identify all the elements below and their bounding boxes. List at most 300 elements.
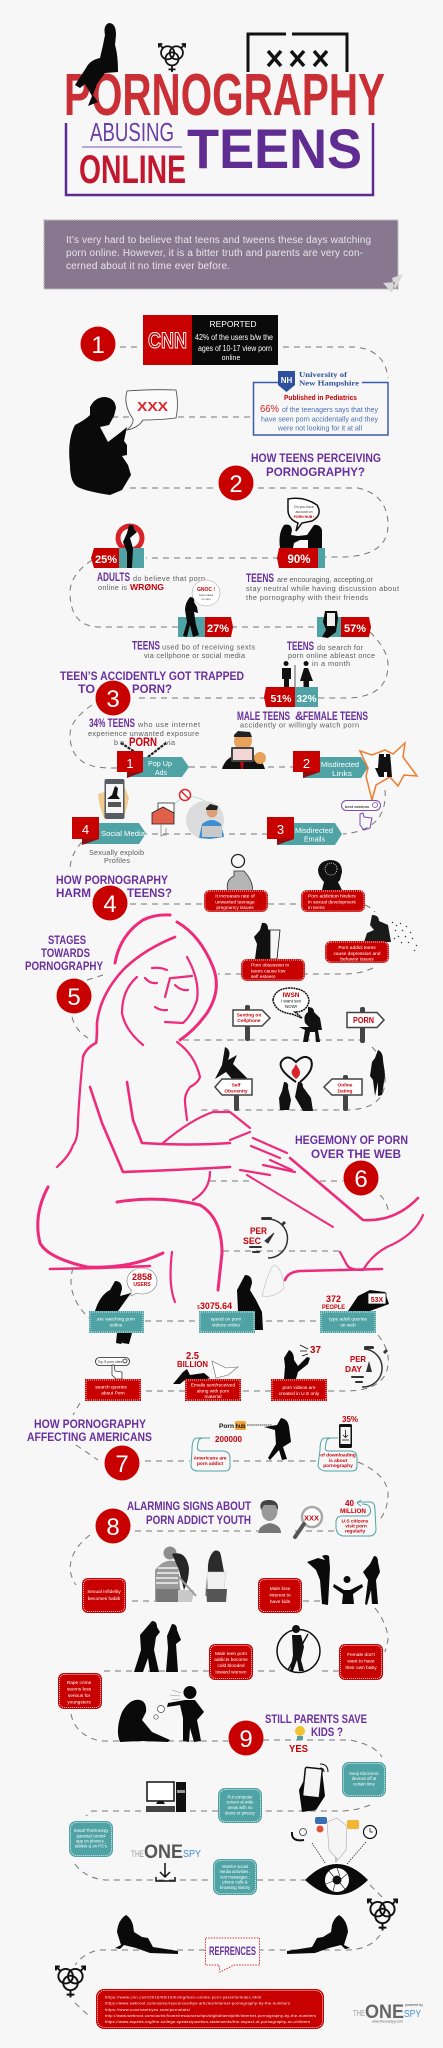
box: sexual infidelity: Sexual Infidelity xyxy=(87,1589,121,1595)
box: monitor social xyxy=(213,1859,257,1895)
item: depression: behavior issues xyxy=(340,956,374,962)
heading: stages towards pornography xyxy=(25,933,103,973)
sign: online dating: Dating xyxy=(338,1088,353,1094)
icon: per second stopwatch xyxy=(243,1217,288,1258)
stat: 57% teens: porn online ableast once xyxy=(288,651,375,660)
stat: search queries: Top 5 porn sites xyxy=(98,1360,123,1364)
panel: University of New Hampshire: New Hampshire xyxy=(299,378,360,388)
sign: sexting on cellphone xyxy=(233,1005,270,1041)
box: rape crime xyxy=(58,1673,102,1709)
icon: heart and couple at computers xyxy=(279,1057,313,1111)
stat: 90% teens: stay neutral while having discussion about xyxy=(246,584,399,593)
icon: eye and monitoring symbols xyxy=(292,1817,376,1895)
heading: alarming signs: ALARMING SIGNS ABOUT xyxy=(127,1499,252,1513)
box: install theonespy: tablets & on PC's xyxy=(75,1844,107,1848)
text: 34% teens exposure: via xyxy=(165,738,176,747)
stat: 25% adults: WRØNG xyxy=(130,582,164,592)
icon: gender symbol right xyxy=(368,1900,397,1930)
item: sexual development: Porn addiction hinders xyxy=(308,894,356,900)
stat: 90% teens: 90% xyxy=(287,554,311,566)
step 7 number: 7 xyxy=(115,1451,129,1478)
item: depression: cause depression and xyxy=(334,951,381,957)
icon: orange starburst with silhouettes xyxy=(360,743,417,800)
step 4 number xyxy=(92,886,128,920)
box: female baby: their own baby xyxy=(345,1665,377,1671)
box: male lose interest: Male lose xyxy=(270,1586,291,1592)
box: rape crime: Rape crime xyxy=(67,1680,92,1686)
stat: $3075.64: 3075.64 xyxy=(200,1301,232,1311)
intro text panel: cerned about it no time ever before. xyxy=(66,261,230,272)
heading: hegemony of porn: OVER THE WEB xyxy=(311,1147,401,1161)
stat: 90% teens: the pornography with their friends xyxy=(246,593,368,602)
box: keep devices off: Keep Electronic xyxy=(349,1771,379,1776)
icon: per second stopwatch: PER xyxy=(250,1226,267,1236)
stat: 372 people: on web xyxy=(340,1322,356,1328)
stat: male and female teens: FEMALE TEENS xyxy=(303,709,368,723)
logo: theonespy footer xyxy=(353,2002,423,2024)
box: cold blooded: toward women xyxy=(215,1670,247,1676)
stat: 27% teens: Gets naked xyxy=(199,593,214,597)
stat: 37 porn videos: 37 xyxy=(310,1345,321,1356)
box: female baby xyxy=(339,1644,383,1680)
heading: how teens perceiving pornography: HOW TEENS PERCEIVING xyxy=(251,451,381,465)
step 8 number xyxy=(96,1508,130,1544)
icon: desktop computer xyxy=(146,1782,186,1812)
stat: 25% adults: 25% xyxy=(95,554,117,566)
heading: hegemony of porn xyxy=(295,1133,408,1161)
box: put computer: screen at wide xyxy=(226,1800,254,1804)
box: monitor social: Monitor social xyxy=(222,1864,248,1869)
stat: 25% adults: ADULTS xyxy=(97,570,130,584)
heading: hegemony of porn: HEGEMONY OF PORN xyxy=(295,1133,408,1147)
stat: 2858 users: online xyxy=(110,1322,123,1328)
step 1 number xyxy=(80,326,116,362)
stat: 35% downloading xyxy=(318,1415,358,1471)
step 8 number: 8 xyxy=(106,1514,120,1541)
stat: 2858 users: are watching porn xyxy=(97,1316,135,1322)
stat: pornhub 200000: Porn xyxy=(219,1423,234,1430)
stat: 2.5 billion emails: Emails sent/received xyxy=(191,1382,235,1388)
icon: boy with phone and speech bubble xyxy=(69,390,178,495)
box: rape crime: seems less xyxy=(67,1686,92,1692)
box: cold blooded: addicts become xyxy=(214,1657,248,1663)
stat: 27% teens: via cellphone or social media xyxy=(144,651,246,660)
box: male lose interest xyxy=(258,1578,302,1613)
logo: theonespy: THE xyxy=(131,1849,144,1859)
box: rape crime: youngsters xyxy=(67,1700,91,1706)
intro text panel: porn online. However, it is a bitter truth and parents are very con- xyxy=(66,248,363,259)
text: 34% teens exposure: who use internet xyxy=(137,720,200,729)
logo: theonespy footer: powered by xyxy=(405,2003,423,2007)
icon: sitting person with speech bubble: IWSN xyxy=(283,992,300,999)
stat: 2.5 billion emails: material xyxy=(204,1394,222,1400)
sign: porn xyxy=(347,1007,384,1043)
stat: $3075.64: $ xyxy=(197,1305,200,1311)
heading: still parents save kids: STILL PARENTS SAVE xyxy=(265,1712,367,1726)
stat: search queries: about Porn xyxy=(101,1390,125,1396)
stat: 35% downloading: pornography xyxy=(323,1463,353,1469)
text: 34% teens exposure: PORN xyxy=(129,735,157,749)
panel: University of New Hampshire xyxy=(254,370,388,435)
box: monitor social: text messages , xyxy=(220,1874,250,1880)
heading: how teens perceiving pornography xyxy=(251,451,381,479)
box: put computer: doors or privacy xyxy=(225,1810,256,1816)
stat: 40 million: U.S citizens xyxy=(342,1518,369,1524)
box: monitor social: media activities , xyxy=(220,1869,250,1874)
stat: 372 people: 372 xyxy=(326,1294,341,1304)
icon: faceless youth xyxy=(258,1500,281,1533)
sign: sexting on cellphone: Cellphone xyxy=(237,1018,261,1024)
illustration: pink line drawing of a woman xyxy=(38,915,423,1302)
stat: male and female teens: & xyxy=(295,709,304,723)
heading: teens accidently got trapped: TEEN’S ACCIDENTLY GOT TRAPPED xyxy=(60,669,244,683)
stat: 27% teens: on cam xyxy=(201,597,211,601)
step 5 number xyxy=(56,978,92,1014)
logo: theonespy: ONE xyxy=(144,1842,183,1863)
box: keep devices off: devices off at xyxy=(352,1776,377,1781)
stat: $3075.64: spend on porn xyxy=(211,1316,242,1322)
panel: University of New Hampshire: Published in Pediatrics xyxy=(284,395,357,402)
stat: 27% teens: GNOC ! xyxy=(197,587,215,593)
item: unwanted pregnancy: pregnancy issues xyxy=(216,905,254,911)
panel: CNN report xyxy=(143,315,278,365)
panel: reference links: https://www.webroot.com/us/en/resources/tips-articles/internet-pornography-by-the-numbers xyxy=(105,2000,290,2006)
item: low self esteem: teens cause low xyxy=(251,968,286,974)
intro text panel: It’s very hard to believe that teens and tweens these days watching xyxy=(66,235,371,246)
panel: reference links: https://www.acpeds.org/the-college-speaks/position-statements/the-impact-of-pornography-on-children xyxy=(105,2019,310,2024)
panel: University of New Hampshire: NH xyxy=(281,376,292,385)
icon: sitting person with speech bubble xyxy=(273,988,322,1042)
tag: social media: 4 xyxy=(82,822,89,837)
text: 34% teens exposure: bo xyxy=(114,738,124,747)
stat: 40 million: visit porn xyxy=(345,1524,367,1530)
subtitle: online: ONLINE xyxy=(79,148,186,192)
item: depression xyxy=(325,915,417,963)
stat: 35% downloading: of downloading xyxy=(320,1452,356,1458)
panel: CNN report: 42% of the users b/w the xyxy=(195,333,273,342)
icon: boy with phone and speech bubble: XXX xyxy=(137,399,168,414)
panel: reference links: https://www.covenanteyes.com/pornstats/ xyxy=(105,2007,191,2012)
stat: 2858 users: 2858 xyxy=(132,1272,152,1282)
tag: social media: Social Media xyxy=(101,829,146,838)
icon: person at laptop in circle with email xyxy=(152,790,224,839)
stat: 90% teens: TEENS xyxy=(246,571,274,585)
icon: light bulb xyxy=(295,1726,305,1740)
box: install theonespy: Install TheOneSpy xyxy=(74,1828,109,1833)
item: low self esteem: self esteem xyxy=(251,974,276,980)
stat: 372 people: type adult queries xyxy=(329,1316,368,1322)
title block xyxy=(64,23,385,195)
item: sexual development xyxy=(301,860,365,912)
dashed connector path xyxy=(70,347,388,2015)
box: sexual infidelity xyxy=(82,1578,126,1613)
step 4 number: 4 xyxy=(103,891,117,918)
step 2 number xyxy=(218,466,254,500)
item: unwanted pregnancy: unwanted teenage xyxy=(215,900,255,906)
tag: misdirected links: Misdirected xyxy=(321,760,359,769)
panel: University of New Hampshire: of the teenagers says that they xyxy=(282,407,378,414)
step 7 number xyxy=(104,1446,140,1480)
sign: online dating: Online xyxy=(338,1082,353,1088)
tag: misdirected links: Links xyxy=(332,769,352,778)
heading: how pornography affecting americans xyxy=(27,1417,152,1444)
logo: theonespy xyxy=(131,1842,201,1863)
box: keep devices off: certain time xyxy=(353,1782,375,1786)
stat: 57% teens xyxy=(287,611,375,668)
stat: pornhub 200000: porn addict xyxy=(197,1461,223,1467)
step 1 number: 1 xyxy=(91,332,105,359)
text: 34% teens exposure: 34% TEENS xyxy=(89,716,135,730)
box: put computer xyxy=(218,1788,262,1823)
panel: CNN report: online xyxy=(222,355,240,362)
heading: how pornography affecting americans: AFFECTING AMERICANS xyxy=(27,1430,152,1444)
silhouette: cat pose woman right xyxy=(287,1915,350,1954)
logo: theonespy footer: SPY xyxy=(404,2009,421,2020)
tag: pop up ads: Ads xyxy=(155,768,167,777)
icon: sitting person with speech bubble: I want sex xyxy=(281,998,302,1004)
stat: 57% teens: 57% xyxy=(344,623,366,635)
panel: reference links: https://www.cnn.com/2016/06/16/living/teen-online-porn-parents/index.html xyxy=(105,1994,261,2000)
tag: misdirected links xyxy=(293,751,368,778)
heading: teens accidently got trapped: PORN? xyxy=(132,682,172,696)
stat: search queries: search queries xyxy=(95,1384,127,1390)
icon: per second stopwatch: SEC xyxy=(243,1236,261,1246)
stat: 35% downloading: is about xyxy=(329,1458,348,1464)
heading: teens accidently got trapped: TO xyxy=(78,682,95,696)
box: install theonespy: parental control xyxy=(77,1834,105,1838)
logo: theonespy: SPY xyxy=(183,1849,201,1860)
stat: 372 people: PEOPLE xyxy=(322,1305,345,1311)
icon: gender symbol xyxy=(159,44,185,72)
box: sexual infidelity: becomes habib xyxy=(88,1596,121,1602)
stat: male and female teens xyxy=(237,661,368,730)
heading: stages towards pornography: PORNOGRAPHY xyxy=(25,959,103,973)
icon: sad teen and shouting man xyxy=(118,1686,204,1742)
stat: 2.5 billion emails xyxy=(173,1351,241,1401)
icon: sitting person with speech bubble: NOW! xyxy=(285,1004,297,1009)
stat: 90% teens: are encouraging, accepting,or xyxy=(277,575,374,584)
box: install theonespy: app on phones , xyxy=(76,1838,106,1844)
sign: online dating xyxy=(324,1075,362,1111)
step 6 number: 6 xyxy=(354,1166,368,1193)
icon: magnifier with XXX xyxy=(295,1507,322,1537)
box: female baby: want to have xyxy=(347,1658,375,1664)
box: female baby: Female don't xyxy=(347,1652,375,1658)
icon: phone in hand xyxy=(98,779,129,819)
stat: male and female teens: 51% xyxy=(270,693,292,705)
stat: $3075.64 xyxy=(197,1265,284,1333)
box: monitor social: browsing history xyxy=(220,1885,251,1890)
box: monitor social: phone calls & xyxy=(222,1880,248,1884)
step 3 number xyxy=(96,680,130,716)
item: sexual development: in teens xyxy=(308,905,325,911)
panel: reference links xyxy=(96,1989,324,2029)
icon: per day stopwatch: PER xyxy=(350,1354,366,1364)
icon: standing woman xyxy=(370,1050,385,1096)
heading: stages towards pornography: STAGES xyxy=(48,933,86,947)
heading: still parents save kids: KIDS ? xyxy=(311,1725,343,1739)
step 9 number: 9 xyxy=(239,1726,253,1753)
stat: 57% teens: TEENS xyxy=(287,639,314,653)
box: put computer: areas with no xyxy=(228,1805,253,1810)
stat: 27% teens: TEENS xyxy=(132,638,160,652)
stat: 40 million: regularly xyxy=(345,1528,365,1534)
tag: misdirected emails xyxy=(267,817,342,845)
stat: 57% teens: do search for xyxy=(317,643,364,652)
item: unwanted pregnancy xyxy=(204,854,268,912)
stat: male and female teens: MALE TEENS xyxy=(237,709,290,723)
subtitle: abusing: ABUSING xyxy=(90,117,174,147)
icon: arguing couple xyxy=(134,1621,181,1672)
stat: 2.5 billion emails: BILLION xyxy=(177,1360,208,1369)
box: rape crime: serious for xyxy=(68,1693,91,1699)
logo: theonespy footer: ONE xyxy=(365,2002,404,2023)
panel: CNN report: ages of 10-17 view porn xyxy=(198,344,272,353)
stat: pornhub 200000: Americans are xyxy=(193,1456,227,1462)
title: teens: TEENS xyxy=(187,117,362,180)
stat: 40 million: 40 xyxy=(345,1499,355,1508)
logo: theonespy footer: THE xyxy=(353,2009,365,2018)
panel: University of New Hampshire: University of xyxy=(299,370,348,379)
stat: 372 people: 53X xyxy=(371,1297,384,1304)
stat: male and female teens: 32% xyxy=(296,694,317,705)
tag: misdirected emails: Misdirected xyxy=(295,826,333,835)
tag: social media: Sexually exploib xyxy=(89,848,144,857)
icon: gender symbol left xyxy=(56,1966,85,1998)
tag: misdirected emails: 3 xyxy=(277,822,284,837)
stat: 27% teens: 27% xyxy=(207,623,229,635)
stat: 372 people xyxy=(320,1290,389,1333)
stat: 2.5 billion emails: 2.5 xyxy=(186,1351,199,1362)
callout: references xyxy=(206,1938,260,1972)
item: depression: Porn addict teens xyxy=(338,945,376,951)
icon: search bar and pointer xyxy=(342,800,380,830)
text: 34% teens exposure xyxy=(88,716,200,757)
icon: per day stopwatch xyxy=(345,1346,388,1387)
panel: University of New Hampshire: have seen porn accidentally and they xyxy=(261,416,378,424)
box: cold blooded: cold blooded xyxy=(217,1663,245,1669)
icon: magnifier with XXX: XXX xyxy=(304,1514,319,1522)
box: install theonespy xyxy=(69,1821,113,1857)
icon: XXX bracket xyxy=(248,34,347,72)
step 2 number: 2 xyxy=(229,471,243,498)
heading: alarming signs: PORN ADDICT YOUTH xyxy=(146,1513,251,1527)
heading: how pornography harm teens xyxy=(56,873,172,900)
stat: 40 million: MILLION xyxy=(340,1508,366,1515)
stat: 37 porn videos xyxy=(271,1345,327,1401)
text: 34% teens exposure: experience unwanted exposure xyxy=(88,729,199,738)
heading: teens accidently got trapped xyxy=(60,669,244,696)
box: put computer: Put computer xyxy=(228,1794,253,1800)
step 6 number xyxy=(344,1160,378,1196)
stat: 37 porn videos: created in U.S only xyxy=(279,1391,320,1397)
stat: 90% teens: account on xyxy=(295,510,313,514)
stat: pornhub 200000: 200000 xyxy=(215,1435,243,1444)
logo: theonespy footer: www.theonespy.com xyxy=(372,2020,403,2024)
icon: no child xyxy=(277,1625,320,1672)
icon: seated girl silhouette xyxy=(75,23,118,106)
stat: 2.5 billion emails: along with porn xyxy=(197,1388,230,1394)
item: sexual development: in sexual development xyxy=(308,900,356,906)
tag: pop up ads xyxy=(117,751,189,778)
silhouette: cat pose woman left xyxy=(115,1915,178,1954)
stat: 27% teens: used bo of receiving sexts xyxy=(162,642,255,652)
icon: search bar and pointer: best casinos xyxy=(345,804,370,809)
panel: CNN report: REPORTED xyxy=(209,319,257,329)
tag: misdirected emails: Emails xyxy=(304,834,325,844)
stat: $3075.64: videos online xyxy=(212,1322,240,1328)
box: keep devices off xyxy=(342,1762,386,1797)
item: low self esteem: Porn obsession in xyxy=(251,962,289,968)
callout: references: REFRENCES xyxy=(209,1944,256,1958)
box: male lose interest: interest to xyxy=(269,1592,291,1598)
step 3 number: 3 xyxy=(106,686,120,713)
box: male lose interest: have kids xyxy=(270,1599,291,1605)
stat: 37 porn videos: porn videos are xyxy=(282,1385,316,1391)
stat: 25% adults: do believe that porn xyxy=(133,574,205,583)
step 9 number xyxy=(228,1720,264,1756)
sign: sexting on cellphone: Sexting on xyxy=(237,1012,261,1018)
stat: 40 million xyxy=(336,1499,376,1536)
sign: self obscenity: Obscenity xyxy=(224,1088,248,1094)
box: cold blooded xyxy=(209,1644,253,1680)
heading: how pornography harm teens: HARM xyxy=(56,886,91,900)
panel: reference links: http://www.webroot.com/us/en/home/resources/tips/digitalfamilylife/internet-pornography-by-the-numbers xyxy=(105,2013,316,2018)
stat: 25% adults: online is xyxy=(98,583,127,592)
stat: pornhub 200000: hub xyxy=(236,1423,246,1430)
tag: pop up ads: 1 xyxy=(126,756,134,771)
icon: man with tablet xyxy=(222,731,266,769)
item: unwanted pregnancy: It increases rate of xyxy=(215,894,255,900)
stat: 2858 users: USERS xyxy=(133,1282,151,1288)
stat: 90% teens: PORN HUB ! xyxy=(294,515,314,519)
stat: 25% adults xyxy=(91,525,205,592)
step 5 number: 5 xyxy=(67,984,81,1011)
panel: CNN report: CNN xyxy=(148,328,187,353)
tag: misdirected links: 2 xyxy=(303,756,310,771)
heading: how pornography affecting americans: HOW PORNOGRAPHY xyxy=(34,1417,146,1431)
sign: self obscenity: Self xyxy=(232,1082,241,1088)
heading: alarming signs xyxy=(127,1499,252,1527)
stat: pornhub 200000 xyxy=(191,1418,291,1471)
box: cold blooded: Male teen porn xyxy=(215,1651,247,1657)
heading: how pornography harm teens: TEENS? xyxy=(127,886,172,900)
icon: download xyxy=(156,1863,175,1881)
heading: how pornography harm teens: HOW PORNOGRAPHY xyxy=(56,873,168,887)
icon: family silhouettes xyxy=(307,1555,380,1605)
stat: 90% teens xyxy=(246,498,399,602)
stat: 57% teens: in a month xyxy=(312,659,350,668)
sign: porn: PORN xyxy=(353,1016,374,1025)
tag: social media xyxy=(72,817,146,865)
stat: 2858 users xyxy=(89,1268,157,1344)
item: low self esteem xyxy=(241,923,305,981)
stat: 27% teens xyxy=(132,580,255,660)
heading: stages towards pornography: TOWARDS xyxy=(41,946,90,960)
tag: pop up ads: Pop Up xyxy=(148,759,172,768)
panel: University of New Hampshire: were not looking for it at all xyxy=(277,426,362,432)
sign: self obscenity xyxy=(215,1047,252,1111)
heading: still parents save kids xyxy=(265,1712,367,1755)
stat: male and female teens: accidently or willingly watch porn xyxy=(240,720,359,730)
heading: still parents save kids: YES xyxy=(289,1744,308,1755)
image: couple and other woman xyxy=(155,1546,227,1602)
stat: 35% downloading: 35% xyxy=(342,1415,358,1424)
stat: 90% teens: Do you have xyxy=(294,505,314,509)
panel: University of New Hampshire: 66% xyxy=(260,404,279,415)
intro text panel xyxy=(44,220,403,293)
heading: how teens perceiving pornography: PORNOGRAPHY? xyxy=(266,465,365,479)
